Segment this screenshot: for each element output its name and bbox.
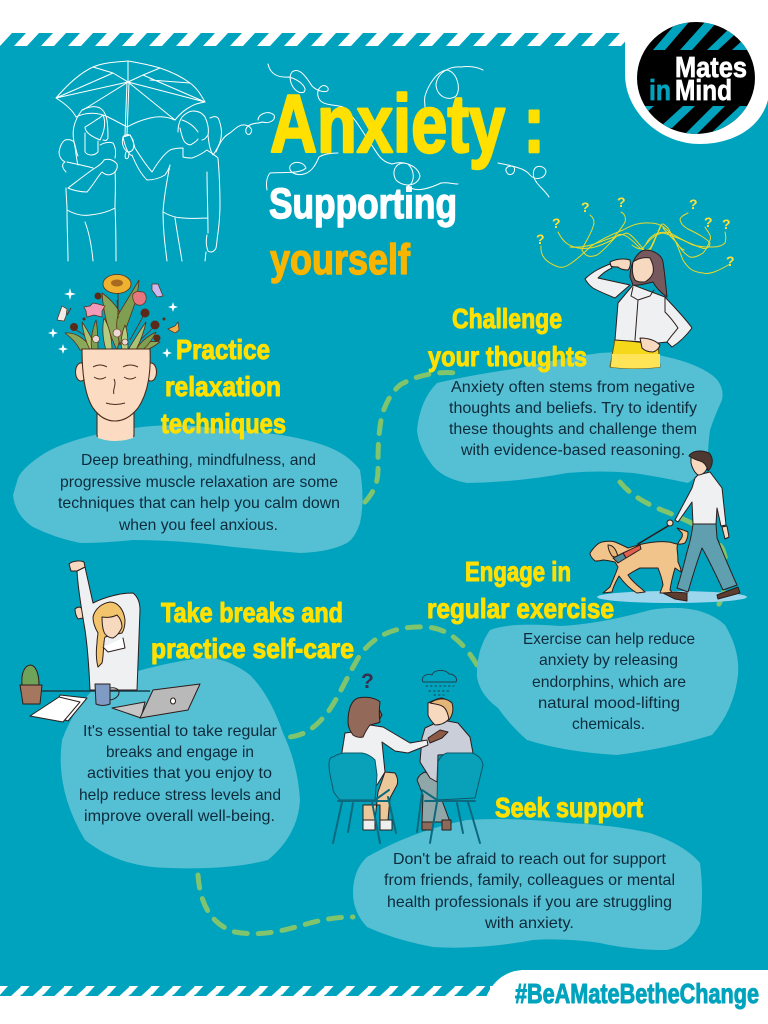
panel: support blob [353,819,702,950]
section: engage in regular exercise: natural mood-lifting [538,695,680,712]
section: challenge your thoughts [428,303,697,459]
section: seek support [384,792,675,932]
section: challenge your thoughts: thoughts and beliefs. Try to identify [449,400,697,417]
flower: sunflower [117,293,119,318]
hair [630,250,667,297]
rain cloud [422,670,457,682]
head [691,455,708,475]
logo: Mates in Mind [625,22,768,144]
section: take breaks and practice self-care: breaks and engage in [106,744,254,761]
title: Anxiety : [270,79,545,170]
section: seek support: with anxiety. [484,915,574,932]
section: practice relaxation techniques: when you feel anxious. [118,517,278,534]
dashed connector paths [198,373,727,934]
dog [590,528,688,593]
illustration: woman stretching at desk [20,561,200,722]
section: engage in regular exercise: anxiety by releasing [539,652,678,669]
illustration: two people under umbrella [56,61,221,261]
head [76,349,156,439]
title [269,79,545,284]
icon: tangled thoughts with question marks: ? [552,215,561,231]
icon: tangled thoughts with question marks [536,194,735,273]
logo: Mates in Mind: Mind [675,75,732,107]
illustration: man walking guide dog [590,451,747,603]
ground [597,591,747,603]
woman face [373,703,382,723]
question mark: ? [361,670,374,693]
icon: tangled thoughts with question marks: ? [722,216,731,232]
section: take breaks and practice self-care: Take breaks and [161,597,343,628]
icon: tangled thoughts with question marks: ? [536,231,545,247]
panel: self-care blob [61,658,300,868]
section: practice relaxation techniques: techniques that can help you calm down [58,495,340,512]
section: practice relaxation techniques: progressive muscle relaxation are some [60,474,338,491]
hand behind [75,607,83,619]
section: take breaks and practice self-care: help reduce stress levels and [79,787,281,804]
logo: Mates in Mind: Mates [675,52,747,84]
section: take breaks and practice self-care: improve overall well-being. [84,808,275,825]
section: seek support: from friends, family, colleagues or mental [384,872,675,889]
section: challenge your thoughts: with evidence-based reasoning. [460,442,685,459]
hand on hip [640,338,660,352]
left person [73,107,108,142]
section: take breaks and practice self-care: practice self-care [151,633,354,664]
section: take breaks and practice self-care [79,597,354,825]
flower: pink [84,303,105,317]
section: challenge your thoughts: Anxiety often stems from negative [451,379,695,396]
section: engage in regular exercise: Exercise can help reduce [523,631,695,648]
laptop [112,702,145,718]
cactus [22,665,39,685]
section: seek support: health professionals if you are struggling [387,894,672,911]
icon: tangled thoughts with question marks: ? [689,196,698,212]
icon: tangled thoughts with question marks: ? [726,253,735,269]
panel: exercise blob [477,608,738,755]
torso and arms [77,567,140,690]
section: practice relaxation techniques: relaxation [165,371,281,402]
right chair [437,753,483,800]
butterflies [57,306,67,321]
woman legs and shoes [363,772,398,820]
section: practice relaxation techniques: Deep breathing, mindfulness, and [81,452,316,469]
man jacket [420,720,473,782]
icon: tangled thoughts with question marks: ? [617,194,626,210]
flower: tulip [133,291,146,305]
section: practice relaxation techniques: Practice [176,334,270,365]
section: seek support: Seek support [495,792,643,823]
panel: relaxation blob [13,425,362,553]
skirt [610,339,660,368]
logo: Mates in Mind: in [649,75,671,107]
raised arm [585,264,630,298]
man legs and shoes [417,772,450,822]
man head [428,698,452,725]
section: take breaks and practice self-care: activities that you enjoy to [87,765,272,782]
section: challenge your thoughts: your thoughts [428,341,587,372]
hand on shoulder [428,730,448,743]
trousers [677,524,737,592]
hair [93,602,125,667]
face [632,258,653,282]
right arm [665,297,692,347]
illustration: woman thinking [585,250,692,368]
face [102,615,122,638]
dog ear [608,545,618,557]
section: engage in regular exercise: Engage in [465,556,571,587]
section: take breaks and practice self-care: It's essential to take regular [83,723,278,740]
section: challenge your thoughts: Challenge [452,303,562,334]
umbrella [56,61,205,127]
icon: head with flowers [48,274,179,441]
section: engage in regular exercise: regular exercise [427,593,614,624]
section: practice relaxation techniques: techniques [161,408,286,439]
shirt [675,472,726,526]
woman torso and arm [342,725,428,785]
section: engage in regular exercise: endorphins, which are [532,674,686,691]
illustration: two people seated [329,670,483,843]
left chair [329,753,377,800]
title: yourself [270,236,411,284]
papers [52,695,87,721]
section: practice relaxation techniques [58,334,340,534]
hands [667,520,673,526]
hand at temple [610,259,630,270]
shirt [615,285,678,343]
harness [623,545,641,558]
mug [95,684,110,706]
icon: tangled thoughts with question marks: ? [704,214,713,230]
decorative squiggles around title [216,64,549,197]
sparkles [48,288,178,358]
shoes [663,592,687,601]
icon: tangled thoughts with question marks: ? [581,199,590,215]
section: seek support: Don't be afraid to reach out for support [393,851,667,868]
panel: challenge blob [417,352,723,483]
raised hand [69,561,85,571]
right person [178,111,208,140]
section: engage in regular exercise: chemicals. [572,716,645,733]
title: Supporting [269,180,457,228]
section: challenge your thoughts: these thoughts and challenge them [449,421,697,438]
woman hair [348,697,380,737]
section: engage in regular exercise [427,556,695,733]
